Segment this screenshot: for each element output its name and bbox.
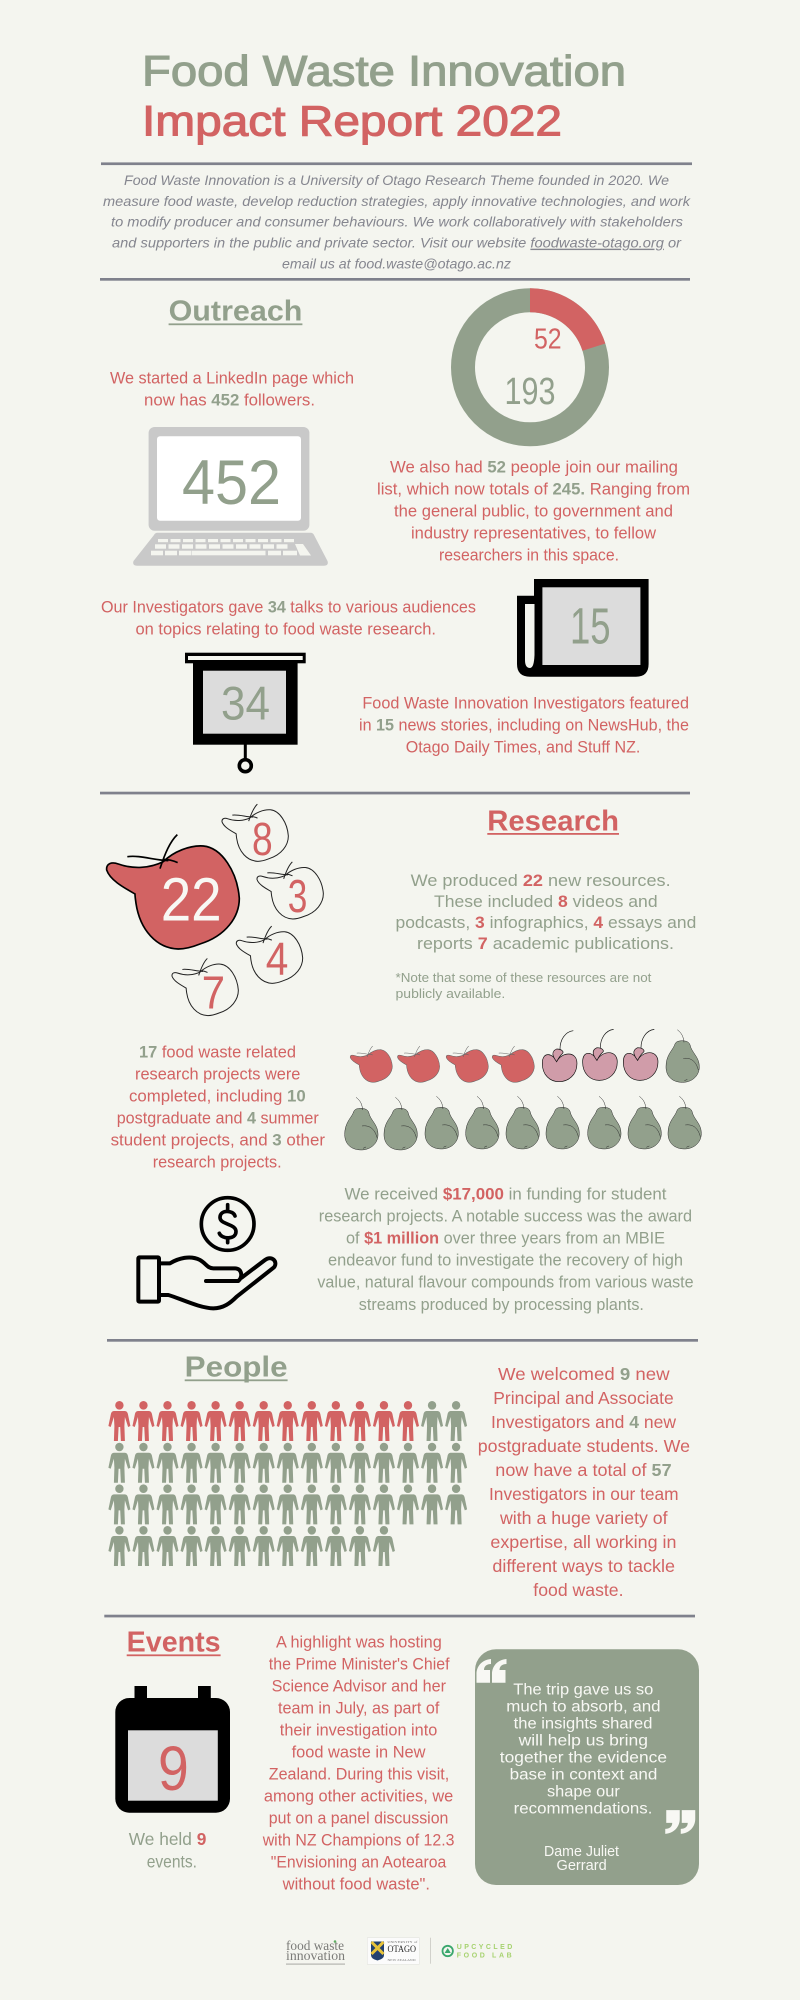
text: highlight event: Science Advisor and her (272, 1678, 446, 1696)
text: mailing list (377, 458, 690, 564)
text: highlight event: team in July, as part of (278, 1700, 440, 1718)
text: mailing list: researchers in this space. (439, 546, 619, 564)
tomato graphic: 22 resources: 22 (161, 866, 222, 934)
logo: University of Otago (367, 1938, 419, 1964)
text: highlight event: with NZ Champions of 12.3 (262, 1832, 454, 1850)
heading: Events: Events (127, 1627, 221, 1659)
text: resources (396, 872, 696, 953)
donut chart: mailing list: 193 (504, 371, 556, 413)
text: highlight event: put on a panel discussion (269, 1810, 448, 1828)
text: people: expertise, all working in (490, 1532, 676, 1552)
logo: food waste innovation: innovation (286, 1949, 345, 1964)
panel: quote (475, 1649, 699, 1885)
logo: University of Otago: NEW ZEALAND (388, 1958, 416, 1962)
text: people: Investigators and 4 new (491, 1412, 676, 1432)
panel: quote: Gerrard (556, 1858, 607, 1874)
heading: Outreach: Outreach (169, 296, 302, 328)
text: people: different ways to tackle (492, 1556, 675, 1576)
panel: quote: will help us bring (517, 1732, 648, 1749)
text: people: food waste. (533, 1580, 624, 1600)
pictogram: 57 investigators (108, 1401, 467, 1566)
text: talks (101, 598, 476, 638)
note (396, 971, 652, 1001)
text: highlight event: Zealand. During this visit, (269, 1766, 449, 1784)
logo: Upcycled Food Lab: FOOD LAB (457, 1953, 512, 1960)
panel: quote: the insights shared (514, 1715, 652, 1732)
text: people: postgraduate students. We (478, 1436, 690, 1456)
text: mailing list: We also had 52 people join our mailing (390, 458, 678, 476)
text: news stories: in 15 news stories, including on NewsHub, the (359, 716, 689, 734)
icon: projector screen with 34: 34 (221, 676, 270, 729)
text: projects: student projects, and 3 other (111, 1131, 326, 1149)
text: projects (111, 1043, 326, 1171)
intro text: Food Waste Innovation is a University of Otago Research Theme founded in 2020. We (124, 172, 669, 188)
text: highlight event: "Envisioning an Aotearoa (271, 1854, 447, 1872)
panel: quote: recommendations. (514, 1800, 652, 1817)
text: highlight event: the Prime Minister's Chief (269, 1656, 450, 1674)
tomato graphic: 22 resources (107, 804, 323, 1018)
text: funding (317, 1186, 694, 1314)
logo: Upcycled Food Lab: UPCYCLED (457, 1944, 512, 1951)
text: news stories: Food Waste Innovation Investigators featured (362, 694, 689, 712)
text: funding: endeavor fund to investigate the recovery of high (328, 1252, 683, 1270)
text: LinkedIn: now has 452 followers. (144, 391, 315, 409)
heading: Research: Research (487, 806, 619, 838)
text: mailing list: industry representatives, to fellow (411, 524, 656, 542)
text: news stories: Otago Daily Times, and Stuff NZ. (406, 738, 640, 756)
text: people: with a huge variety of (499, 1508, 668, 1528)
heading: People: People (185, 1352, 288, 1384)
icon: laptop with 452: 452 (182, 448, 281, 518)
text: resources: We produced 22 new resources. (411, 872, 671, 890)
text: highlight event: food waste in New (292, 1744, 426, 1762)
icon: calendar with 9: 9 (158, 1734, 189, 1804)
title (142, 48, 626, 146)
text: highlight event: their investigation into (280, 1722, 437, 1740)
text: projects: postgraduate and 4 summer (117, 1109, 319, 1127)
note: publicly available. (396, 987, 505, 1001)
text: resources: podcasts, 3 infographics, 4 essays and (396, 914, 696, 932)
logo: food waste innovation (286, 1939, 345, 1965)
tomato graphic: 22 resources: 4 (266, 932, 288, 984)
intro text: and supporters in the public and private sector. Visit our website foodwaste-otago.org or (112, 235, 682, 251)
intro text (103, 172, 691, 272)
text: funding: streams produced by processing plants. (359, 1296, 644, 1314)
text: people: We welcomed 9 new (498, 1364, 670, 1384)
intro text: measure food waste, develop reduction strategies, apply innovative technologies, and work (103, 193, 691, 209)
panel: quote: The trip gave us so (513, 1681, 653, 1698)
donut chart: mailing list: 52 (534, 323, 562, 355)
text: news stories (359, 694, 689, 756)
text: resources: These included 8 videos and (434, 893, 658, 911)
text: resources: reports 7 academic publications. (417, 935, 674, 953)
intro text: email us at food.waste@otago.ac.nz (282, 256, 511, 272)
title: Impact Report 2022 (142, 98, 562, 146)
icon: hand holding dollar coin (138, 1198, 275, 1308)
text: events count: We held 9 (129, 1829, 207, 1849)
logo: University of Otago: UNIVERSITY of (388, 1940, 418, 1944)
tomato graphic: 22 resources: 8 (252, 813, 273, 865)
tomato graphic: 22 resources: 3 (288, 870, 307, 922)
text: talks: on topics relating to food waste research. (136, 620, 436, 638)
logo: Upcycled Food Lab (442, 1944, 512, 1960)
text: talks: Our Investigators gave 34 talks to various audiences (101, 598, 476, 616)
intro text: to modify producer and consumer behaviours. We work collaboratively with stakeholders (111, 214, 683, 230)
text: people: Principal and Associate (493, 1388, 674, 1408)
fruit pictogram: 17 projects (345, 1029, 701, 1150)
text: highlight event: without food waste". (282, 1876, 430, 1894)
title: Food Waste Innovation (142, 48, 626, 96)
text: people: Investigators in our team (489, 1484, 679, 1504)
text: highlight event (262, 1634, 454, 1894)
text: people: now have a total of 57 (495, 1460, 672, 1480)
icon: calendar with 9 (115, 1686, 230, 1813)
icon: laptop with 452 (133, 427, 328, 566)
panel: quote: base in context and (510, 1766, 657, 1783)
panel: quote: together the evidence (500, 1749, 667, 1766)
note: *Note that some of these resources are not (396, 971, 652, 985)
text: projects: completed, including 10 (129, 1087, 306, 1105)
text: LinkedIn (110, 369, 354, 409)
text: funding: value, natural flavour compounds from various waste (317, 1274, 694, 1292)
text: funding: We received $17,000 in funding for student (344, 1186, 667, 1204)
text: events count: events. (147, 1851, 197, 1871)
panel: quote: shape our (547, 1783, 620, 1800)
donut chart: mailing list (463, 288, 605, 434)
text: mailing list: list, which now totals of 245. Ranging from (377, 480, 690, 498)
panel: quote: Dame Juliet (544, 1844, 619, 1860)
text: funding: of $1 million over three years from an MBIE (346, 1230, 665, 1248)
tomato graphic: 22 resources: 7 (202, 966, 225, 1018)
text: events count (129, 1829, 207, 1871)
icon: projector screen with 34 (185, 653, 306, 772)
text: funding: research projects. A notable success was the award (319, 1208, 692, 1226)
icon: newspaper with 15 (517, 579, 649, 677)
text: mailing list: the general public, to government and (394, 502, 673, 520)
logo: food waste innovation: food waste (286, 1939, 344, 1954)
logo: University of Otago: OTAGO (388, 1944, 416, 1954)
icon: newspaper with 15: 15 (570, 597, 611, 654)
text: highlight event: among other activities, we (264, 1788, 453, 1806)
text: people (478, 1364, 690, 1600)
text: projects: 17 food waste related (139, 1043, 296, 1061)
text: highlight event: A highlight was hosting (276, 1634, 442, 1652)
text: projects: research projects. (153, 1153, 282, 1171)
text: LinkedIn: We started a LinkedIn page which (110, 369, 354, 387)
panel: quote: much to absorb, and (506, 1698, 661, 1715)
text: projects: research projects were (135, 1065, 300, 1083)
